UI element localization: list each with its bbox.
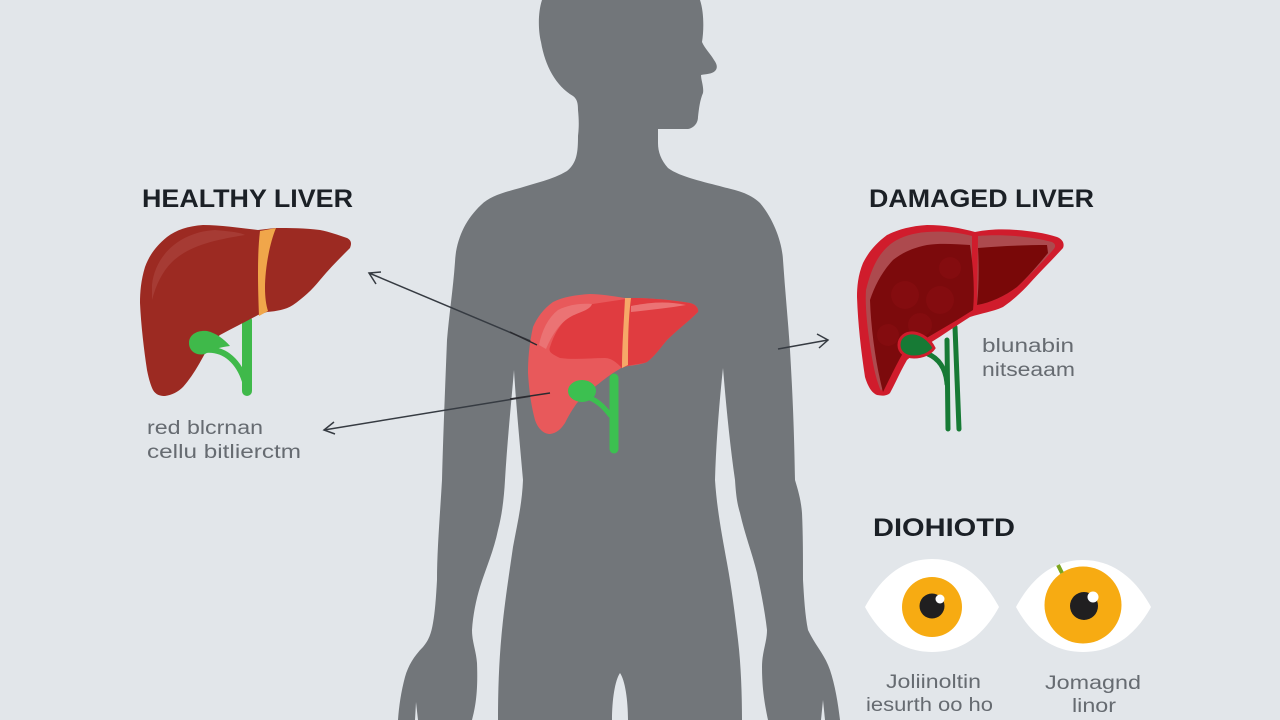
arrow: to healthy label <box>324 393 550 434</box>
healthy liver label <box>147 418 301 463</box>
damaged liver: gallbladder <box>899 333 934 357</box>
healthy liver: lobes <box>140 225 351 396</box>
damaged liver illustration <box>857 225 1064 429</box>
healthy liver: orange divider <box>258 228 276 316</box>
healthy liver illustration <box>140 225 351 396</box>
healthy liver label: red blcrnan <box>147 418 263 439</box>
left eye label: Joliinoltin <box>886 672 981 693</box>
central liver: darker upper area <box>549 298 698 368</box>
damaged liver: mottled spots <box>877 257 961 346</box>
damaged liver label: blunabin <box>982 336 1074 357</box>
central liver: lobes <box>528 294 698 434</box>
healthy liver: bile duct <box>242 320 252 391</box>
heading: damaged liver: DAMAGED LIVER <box>869 185 1094 213</box>
human body silhouette <box>398 0 840 720</box>
central liver: orange divider <box>622 298 631 368</box>
damaged liver: dark tissue <box>870 244 974 392</box>
damaged liver: outer lobes <box>857 225 1064 396</box>
central liver: gallbladder and duct <box>568 378 614 449</box>
right eye label: Jomagnd <box>1045 673 1141 694</box>
healthy liver label: cellu bitlierctm <box>147 442 301 463</box>
icon: right eye <box>1016 560 1151 652</box>
healthy liver: gallbladder <box>189 331 246 385</box>
leader lines over central liver <box>510 332 550 399</box>
icon: left eye <box>865 559 999 652</box>
damaged liver label: nitseaam <box>982 360 1075 381</box>
heading: healthy liver: HEALTHY LIVER <box>142 185 353 213</box>
central liver in body <box>528 294 698 449</box>
central liver: highlights <box>539 304 592 349</box>
arrow: to damaged liver <box>778 334 828 349</box>
healthy liver: highlight <box>152 230 245 300</box>
damaged liver label <box>982 336 1075 381</box>
arrow: to healthy liver <box>369 272 540 345</box>
left eye label <box>866 672 993 716</box>
damaged liver: bile ducts <box>928 327 959 429</box>
right eye label <box>1045 673 1141 717</box>
left eye label: iesurth oo ho <box>866 695 993 716</box>
damaged liver: pale rim <box>866 232 972 391</box>
heading: eye section: DIOHIOTD <box>873 514 1015 542</box>
right eye label: linor <box>1072 696 1117 717</box>
